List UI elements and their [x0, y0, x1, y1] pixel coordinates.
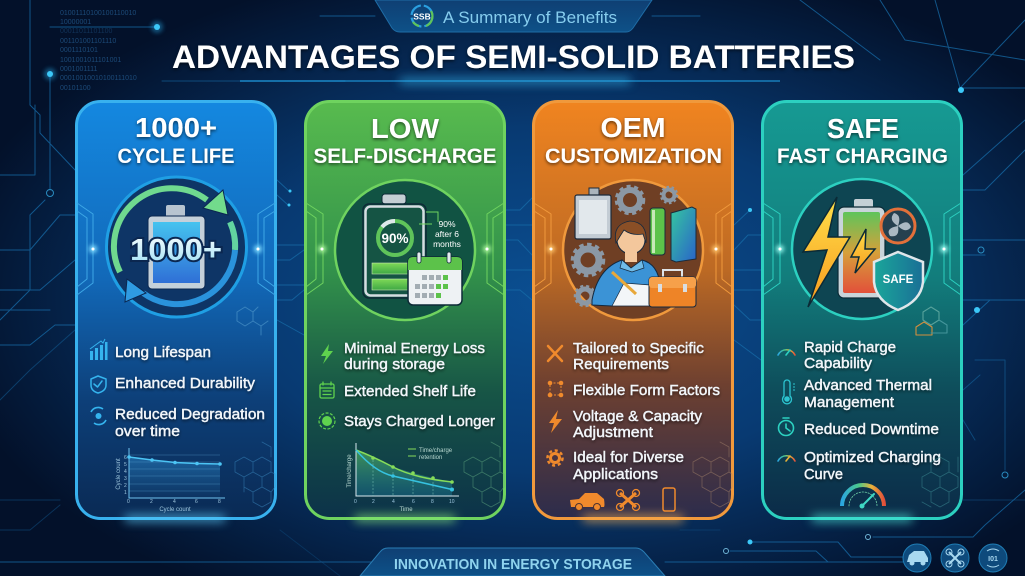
text: diverse applications: Applications	[573, 466, 658, 483]
icon: growth bars	[90, 339, 108, 360]
bottom glow	[355, 516, 455, 521]
line chart: charge retention: 6	[412, 499, 415, 505]
binary code decoration: 0001110101	[60, 47, 98, 54]
binary code decoration: 01001110100100110010	[60, 10, 136, 17]
side brackets	[77, 203, 275, 295]
icon: voltage bolt	[549, 410, 562, 433]
line chart: cycle count: 8	[218, 499, 221, 505]
text: voltage	[573, 408, 703, 441]
text: rapid charge	[804, 339, 896, 372]
side glow nodes	[547, 245, 720, 253]
line chart: cycle count: Cycle count	[159, 507, 191, 513]
bottom glow	[125, 516, 225, 521]
text: optimized curve: Curve	[804, 466, 843, 483]
icon: gauge	[778, 456, 795, 461]
text: thermal	[804, 377, 932, 411]
line chart: cycle count: 4	[124, 469, 127, 475]
line chart: charge retention: 8	[431, 499, 434, 505]
cylinder cell	[650, 208, 665, 255]
bottom glow	[583, 516, 683, 521]
text: voltage: Adjustment	[573, 424, 654, 441]
line chart: charge retention: Time/charge	[419, 448, 453, 454]
icon: battery with cycle arrows: 1000+	[130, 232, 222, 267]
pouch cell	[575, 188, 611, 239]
paper and pen	[612, 283, 650, 306]
logo: SSB	[412, 6, 432, 26]
heading: OEM	[600, 112, 666, 143]
line chart: cycle count: Cycle count	[116, 458, 122, 490]
text: minimal energy loss: during storage	[344, 356, 445, 373]
prismatic cell	[671, 207, 696, 262]
text: diverse applications	[573, 449, 684, 483]
text: reduced downtime: Reduced Downtime	[804, 421, 939, 438]
line chart: charge retention: 4	[392, 499, 395, 505]
icon: battery, charge ring and calendar: after 6	[435, 229, 459, 239]
text: thermal: Management	[804, 394, 895, 411]
side glow nodes	[318, 245, 491, 253]
icon: shield check	[91, 376, 106, 393]
icon: stopwatch	[778, 418, 794, 436]
text: flexible form factors: Flexible Form Factors	[573, 382, 720, 399]
footer tab: INNOVATION IN ENERGY STORAGE	[394, 556, 632, 573]
text: enhanced durability: Enhanced Durability	[115, 375, 256, 392]
header tab	[375, 0, 652, 32]
line chart: charge retention: Time	[399, 507, 413, 513]
heading	[314, 113, 496, 168]
text: optimized curve	[804, 449, 941, 483]
text: rapid charge: Capability	[804, 355, 873, 372]
bullet list	[319, 340, 495, 430]
footer tab	[360, 548, 665, 576]
text: tailored: Requirements	[573, 356, 669, 373]
bullet list	[90, 339, 265, 440]
heading: SAFE	[827, 113, 899, 144]
toolbox	[649, 270, 696, 307]
line chart: cycle count: 0	[127, 499, 130, 505]
icon: reduced degradation	[91, 407, 106, 425]
text: minimal energy loss	[344, 340, 485, 373]
text: minimal energy loss: Minimal Energy Loss	[344, 340, 485, 357]
icon: gauge	[778, 350, 795, 355]
line chart: cycle count: 1	[124, 490, 127, 496]
icon: battery, charge ring and calendar: months	[433, 239, 461, 249]
icon: molecule	[916, 307, 947, 335]
icon: molecule	[237, 307, 268, 335]
icon: engineer with batteries and gears	[563, 180, 703, 320]
engineer body	[592, 260, 660, 306]
gears	[572, 186, 677, 306]
panel: low self-discharge	[306, 102, 504, 521]
icon: battery, charge ring and calendar: 90%	[438, 219, 456, 229]
line chart: cycle count: 6	[124, 455, 127, 461]
line chart: cycle count: 6	[195, 499, 198, 505]
subtitle: A Summary of Benefits	[443, 8, 617, 27]
icon: timer	[319, 413, 335, 429]
text: stays charged longer: Stays Charged Longer	[344, 413, 495, 430]
icon: gear	[548, 450, 562, 466]
footer icon: drone	[941, 544, 969, 572]
hex pattern	[464, 442, 504, 507]
side glow nodes	[776, 245, 948, 253]
text: thermal: Advanced Thermal	[804, 377, 932, 394]
text: reduced degradation: Reduced Degradation	[115, 406, 265, 423]
side brackets	[534, 203, 732, 295]
binary code decoration: 001101001101110	[60, 38, 116, 45]
text: diverse applications: Ideal for Diverse	[573, 449, 684, 466]
hex pattern	[693, 442, 732, 507]
heading: 1000+	[135, 112, 217, 143]
binary code decoration	[60, 10, 137, 92]
panel: oem customization	[534, 102, 732, 521]
text: long lifespan: Long Lifespan	[115, 344, 211, 361]
icon: battery, charge ring and calendar	[335, 180, 475, 320]
logo: SSB: SSB	[413, 12, 431, 22]
small bolt	[851, 229, 875, 273]
line chart: charge retention	[347, 443, 459, 513]
icon: bolt	[321, 344, 333, 364]
icon: car	[570, 493, 604, 510]
heading	[777, 113, 948, 168]
text: extended shelf life: Extended Shelf Life	[344, 383, 476, 400]
icon: drone	[616, 490, 640, 510]
bullet list	[778, 339, 941, 483]
line chart: charge retention: retention	[419, 455, 442, 461]
title underline glow	[240, 79, 780, 83]
heading: FAST CHARGING	[777, 145, 948, 168]
binary code decoration: 10000001	[60, 19, 91, 26]
side brackets	[306, 203, 504, 295]
line chart: cycle count: 2	[150, 499, 153, 505]
icon: calendar	[320, 382, 334, 398]
hex pattern	[922, 457, 958, 507]
heading	[545, 112, 722, 168]
line chart: charge retention: Time/charge	[347, 454, 353, 488]
side brackets	[763, 203, 961, 295]
large bolt	[803, 197, 850, 307]
bottom glow	[812, 516, 912, 521]
panel: safe fast charging	[762, 102, 962, 521]
line chart: cycle count	[116, 448, 225, 513]
line chart: charge retention: 10	[449, 499, 455, 505]
binary code decoration: 0001001111	[60, 66, 97, 73]
shield: SAFE	[883, 274, 914, 286]
footer icon: vehicle	[903, 544, 931, 572]
icon: form factor nodes	[548, 381, 563, 397]
heading: LOW	[371, 113, 440, 144]
line chart: charge retention: 0	[354, 499, 357, 505]
text: rapid charge: Rapid Charge	[804, 339, 896, 356]
heading	[118, 112, 234, 168]
side glow nodes	[89, 245, 262, 253]
text: reduced degradation	[115, 406, 265, 440]
panel: cycle life	[76, 102, 276, 521]
binary code decoration: 1001001011101001	[60, 57, 121, 64]
binary code decoration: 00101100	[60, 85, 91, 92]
title: ADVANTAGES OF SEMI-SOLID BATTERIES	[172, 39, 855, 75]
line chart: cycle count: 2	[124, 483, 127, 489]
line chart: cycle count: 4	[173, 499, 176, 505]
line chart: charge retention: 2	[372, 499, 375, 505]
line chart: cycle count: 5	[124, 462, 127, 468]
heading: CYCLE LIFE	[118, 145, 234, 168]
icon: thermometer	[782, 380, 795, 404]
icon: tools	[548, 346, 562, 361]
heading: SELF-DISCHARGE	[314, 145, 496, 168]
icon: battery, charge ring and calendar: 90%	[381, 231, 409, 246]
binary code decoration: 00011011101100	[60, 28, 113, 35]
hex pattern	[235, 442, 275, 507]
text: voltage: Voltage & Capacity	[573, 408, 703, 425]
text: tailored	[573, 340, 705, 373]
bullet list	[548, 340, 720, 483]
text: tailored: Tailored to Specific	[573, 340, 705, 357]
footer icon: wireless device: I01	[988, 556, 998, 563]
icon: bolt, battery, fan and shield	[792, 179, 932, 319]
fan	[881, 209, 915, 243]
icon: charging gauge	[842, 485, 884, 508]
heading: CUSTOMIZATION	[545, 145, 722, 168]
footer icon: wireless device	[979, 544, 1007, 572]
icon: battery with cycle arrows	[106, 177, 246, 317]
text: reduced degradation: over time	[115, 423, 180, 440]
icon: phone	[663, 488, 675, 511]
line chart: cycle count: 3	[124, 476, 127, 482]
text: optimized curve: Optimized Charging	[804, 449, 941, 466]
binary code decoration: 00010010010100111010	[60, 75, 137, 82]
